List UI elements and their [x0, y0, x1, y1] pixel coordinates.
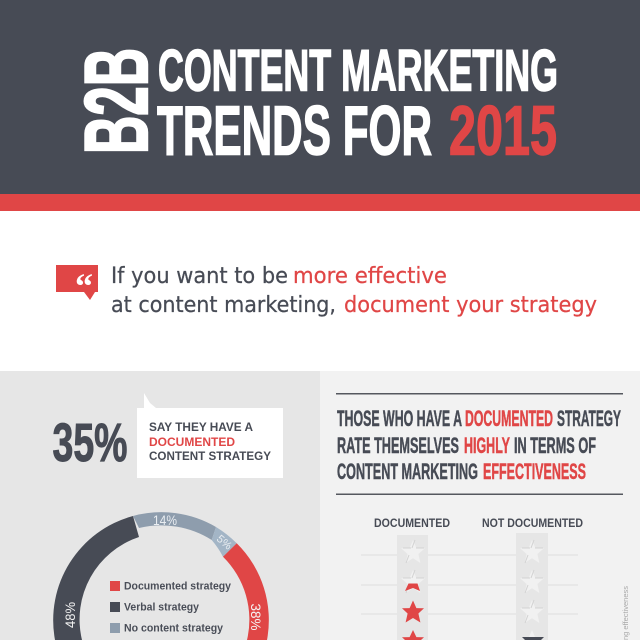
segment: 5%: [212, 527, 237, 557]
callout: documented content strategy: DOCUMENTED: [149, 435, 235, 449]
legend: [110, 580, 232, 634]
segment: none 14%: [133, 512, 216, 540]
donut value labels: 5%: [214, 533, 234, 553]
donut value labels: 48%: [62, 602, 78, 628]
title: content marketing trends for 2015: TRENDS FOR: [157, 92, 432, 170]
column headings: NOT DOCUMENTED: [482, 518, 583, 530]
segment: documented 38%: [223, 543, 269, 640]
callout: documented content strategy: SAY THEY HAVE A: [149, 420, 253, 434]
heading: effectiveness: THOSE WHO HAVE A: [337, 406, 462, 431]
column headings: DOCUMENTED: [374, 518, 450, 530]
column: not documented ratings: [516, 533, 548, 640]
title: content marketing trends for 2015: [157, 38, 558, 170]
column headings: [374, 518, 583, 530]
icon: quote bubble: [56, 265, 98, 306]
quote text: at content marketing,: [111, 293, 336, 318]
heading: effectiveness: DOCUMENTED: [465, 406, 553, 431]
heading: effectiveness: RATE THEMSELVES: [337, 433, 459, 458]
quote text: document your strategy: [344, 293, 597, 318]
header band: [0, 0, 640, 194]
panel: right background: [320, 371, 640, 640]
stat: 35%: 35%: [52, 414, 128, 473]
quote text: more effective: [293, 264, 447, 289]
segment: verbal 48%: [53, 516, 139, 640]
red stripe: [0, 194, 640, 211]
donut value labels: [62, 512, 264, 630]
axis label: ng effectiveness: [621, 586, 630, 640]
heading: effectiveness: HIGHLY: [464, 433, 510, 458]
legend: Documented strategy: [124, 580, 232, 592]
heading: effectiveness: CONTENT MARKETING: [337, 459, 478, 484]
panel: left background: [0, 371, 320, 640]
quote text: If you want to be: [111, 264, 288, 289]
donut value labels: 38%: [248, 604, 264, 630]
title: content marketing trends for 2015: 2015: [449, 92, 557, 170]
callout: documented content strategy: [137, 393, 283, 478]
callout: documented content strategy: CONTENT STRATEGY: [149, 449, 271, 463]
donut value labels: 14%: [153, 512, 177, 528]
heading: effectiveness: [337, 406, 621, 484]
icon: quote bubble: “: [75, 266, 93, 306]
donut chart: [53, 512, 269, 640]
quote text: [111, 264, 597, 318]
legend: No content strategy: [124, 622, 224, 634]
legend: Verbal strategy: [124, 602, 200, 614]
column: documented ratings: [397, 535, 428, 640]
